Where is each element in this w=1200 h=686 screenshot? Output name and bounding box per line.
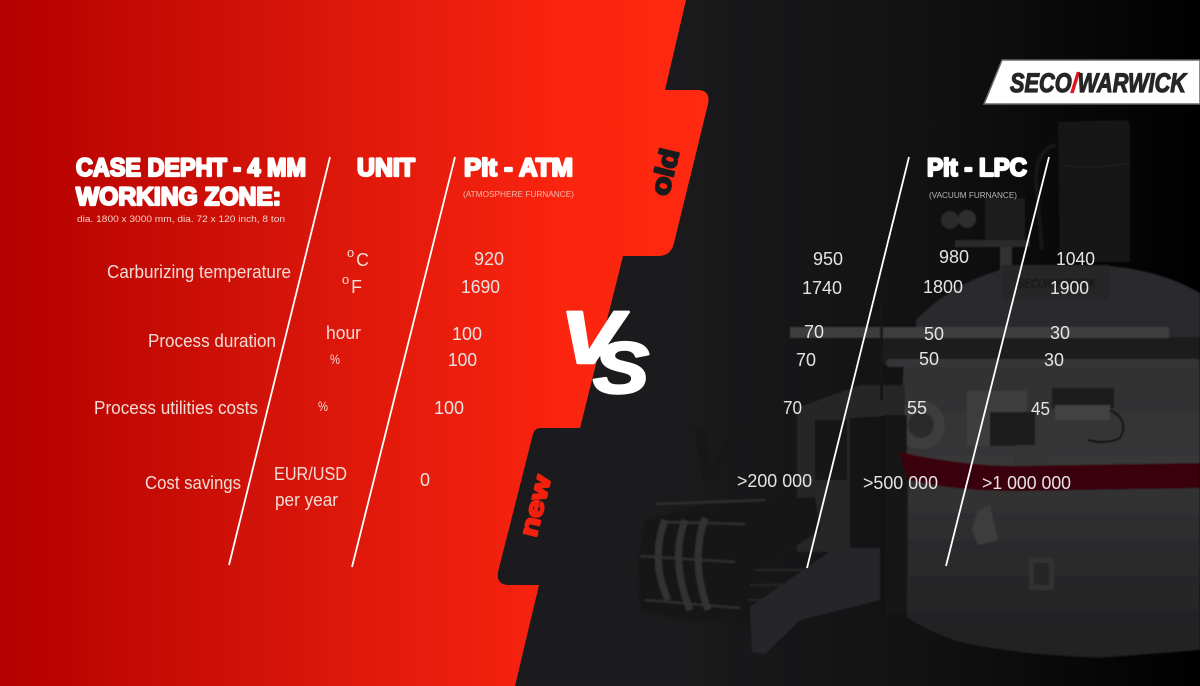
- logo plate: [984, 60, 1200, 104]
- tab label: old: old: [645, 146, 685, 198]
- unit: fahrenheit: F: [351, 277, 362, 297]
- unit: per year: per year: [275, 490, 338, 510]
- row label: process duration: Process duration: [148, 331, 276, 351]
- lower body: [907, 480, 1200, 658]
- furnace photo: [638, 120, 1200, 658]
- flange bar: [790, 327, 1169, 338]
- lower body fittings: [972, 505, 1054, 590]
- Pit LPC column 2 values: 55: [907, 398, 927, 418]
- unit: celsius: o: [347, 245, 354, 260]
- heading: working zone: WORKING ZONE:: [76, 183, 281, 211]
- Pit ATM values: 100: [452, 324, 482, 344]
- Pit LPC column 2 values: 980: [939, 247, 969, 267]
- red band: [899, 452, 1200, 491]
- heading: Pit LPC: Pit - LPC: [927, 154, 1027, 182]
- furnace dome: [916, 266, 1200, 340]
- unit: fahrenheit: o: [342, 272, 349, 287]
- heading: Pit ATM: Pit - ATM: [464, 154, 573, 182]
- Pit LPC column 1 values: 70: [804, 322, 824, 342]
- column divider 4: [946, 157, 1049, 566]
- Pit ATM values: 1690: [461, 277, 500, 297]
- Pit LPC column 3 values: 30: [1050, 323, 1070, 343]
- column divider 3: [807, 157, 909, 568]
- subheading: atmosphere furnace: (ATMOSPHERE FURNANCE): [463, 189, 574, 199]
- nameplate: SECO/WARWICK: [1018, 275, 1097, 291]
- column divider 2: [352, 157, 455, 567]
- subheading: vacuum furnace: (VACUUM FURNANCE): [929, 190, 1017, 200]
- row label: cost savings: Cost savings: [145, 473, 241, 493]
- Pit LPC column 3 values: 30: [1044, 350, 1064, 370]
- ghost V watermark: V: [688, 412, 744, 497]
- Pit ATM values: 100: [448, 350, 477, 370]
- nameplate: [1002, 265, 1109, 300]
- Pit LPC column 1 values: 950: [813, 249, 843, 269]
- Pit LPC column 2 values: [863, 247, 969, 493]
- cable chain: [638, 497, 820, 625]
- VS badge: [560, 296, 649, 409]
- working zone dimensions: dia. 1800 x 3000 mm, dia. 72 x 120 inch, 8 ton: [77, 214, 285, 225]
- Pit LPC column 1 values: 70: [783, 398, 802, 418]
- tab label: new: new: [515, 472, 557, 539]
- Pit LPC column 3 values: >1 000 000: [982, 473, 1071, 493]
- Pit LPC column 3 values: 1900: [1050, 278, 1089, 298]
- letter S: S: [593, 329, 649, 409]
- Pit LPC column 3 values: [982, 249, 1095, 493]
- Pit LPC column 1 values: 70: [796, 350, 816, 370]
- Pit LPC column 3 values: 45: [1031, 399, 1050, 419]
- Pit LPC column 2 values: 50: [919, 349, 939, 369]
- unit: percent costs: %: [318, 398, 328, 414]
- Pit ATM values: 100: [434, 398, 464, 418]
- gauges and pipework: [941, 198, 1030, 272]
- support arm: [750, 548, 880, 654]
- Pit LPC column 2 values: >500 000: [863, 473, 938, 493]
- Pit LPC column 2 values: 50: [924, 324, 944, 344]
- Pit LPC column 1 values: [737, 249, 843, 491]
- units column: [274, 245, 369, 510]
- Pit LPC column 2 values: 1800: [923, 277, 963, 297]
- Pit ATM values: 0: [420, 470, 430, 490]
- logo: [984, 60, 1200, 104]
- upper body: [899, 340, 1200, 466]
- Pit LPC column 1 values: 1740: [802, 278, 842, 298]
- column divider 1: [229, 157, 330, 565]
- piping band: [880, 337, 1200, 367]
- Pit ATM values: 920: [474, 249, 504, 269]
- Pit LPC column 3 values: 1040: [1056, 249, 1095, 269]
- heading: unit: UNIT: [357, 154, 415, 182]
- valve block: [897, 388, 1123, 469]
- row label: process utilities costs: Process utilities costs: [94, 398, 258, 418]
- Pit LPC column 1 values: >200 000: [737, 471, 812, 491]
- heading: case depth: CASE DEPHT - 4 MM: [76, 154, 306, 182]
- unit: EUR/USD: EUR/USD: [274, 464, 347, 484]
- red panel: old: [0, 0, 709, 686]
- unit: percent duration: %: [330, 351, 340, 367]
- row label: carburizing temperature: Carburizing temperature: [107, 262, 291, 282]
- support frame: [797, 300, 907, 615]
- letter V: V: [560, 296, 629, 379]
- motor cylinder: [1036, 120, 1130, 262]
- Pit ATM values: [420, 249, 504, 490]
- unit: celsius: C: [356, 250, 369, 270]
- unit: hour: hour: [326, 323, 361, 343]
